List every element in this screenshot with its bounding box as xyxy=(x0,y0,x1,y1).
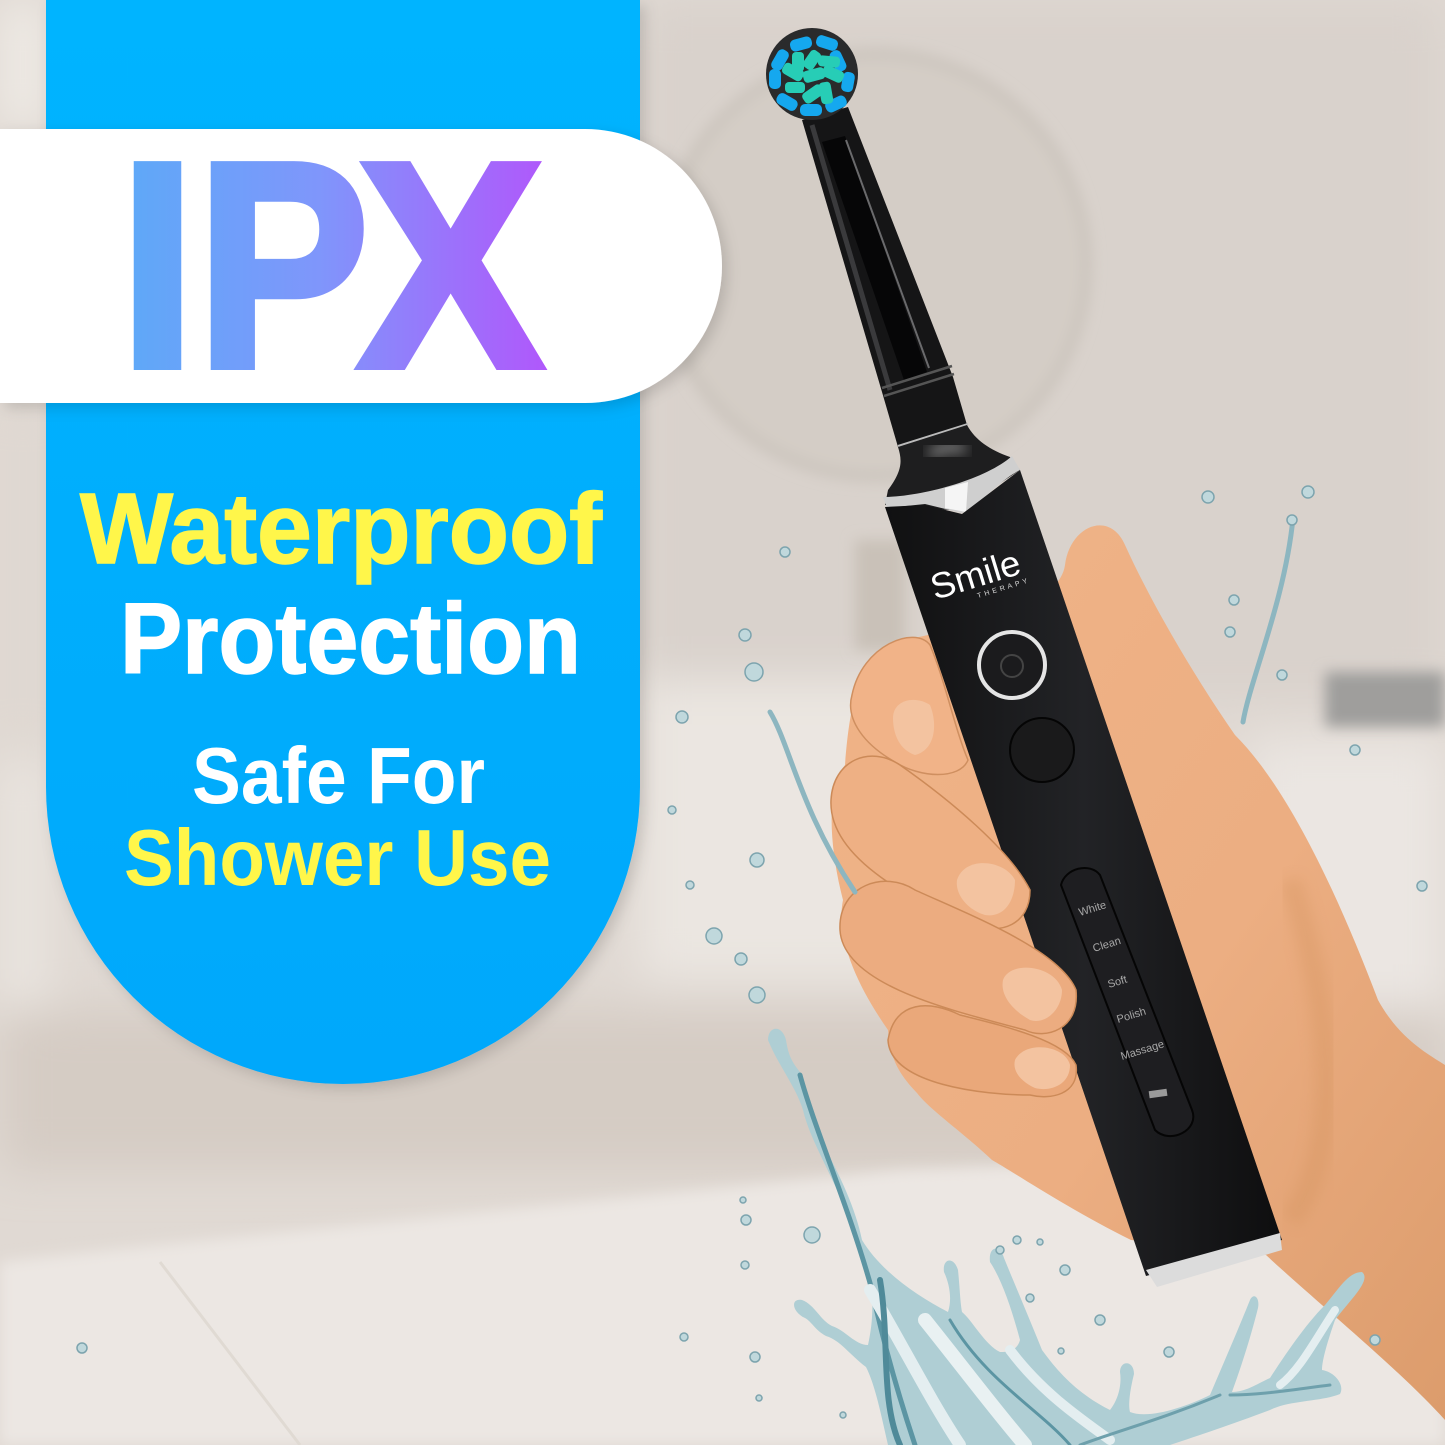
title: IPX: X xyxy=(358,102,544,428)
mode panel: White xyxy=(1077,899,1108,919)
logo: Smile xyxy=(925,542,1025,608)
toothbrush xyxy=(766,28,1282,1287)
heading: Waterproof: Waterproof xyxy=(80,473,603,585)
second button xyxy=(1010,718,1074,782)
mode panel xyxy=(1061,868,1193,1136)
subheading: Safe For: Safe For xyxy=(192,731,485,820)
silver base ring xyxy=(1146,1233,1282,1287)
white pill banner xyxy=(0,129,722,403)
blue panel xyxy=(46,0,640,1084)
fingers in front of toothbrush xyxy=(831,637,1076,1097)
water splash xyxy=(768,518,1365,1445)
brush neck xyxy=(802,107,968,447)
mode panel: Massage xyxy=(1119,1038,1166,1063)
title: IPX: I xyxy=(119,102,196,428)
power button xyxy=(979,632,1045,698)
mode panel: Clean xyxy=(1091,935,1122,955)
hand behind toothbrush xyxy=(832,525,1445,1420)
mode panel: Soft xyxy=(1106,974,1129,991)
fingernails xyxy=(893,700,934,755)
mode panel: Polish xyxy=(1115,1006,1148,1026)
water droplets xyxy=(77,486,1427,1418)
title: IPX: P xyxy=(197,102,369,428)
handle body xyxy=(885,470,1282,1276)
collar xyxy=(885,425,1020,510)
logo: THERAPY xyxy=(977,578,1029,600)
subheading: Shower Use: Shower Use xyxy=(124,813,551,902)
brush head xyxy=(766,28,858,120)
title: IPX xyxy=(119,102,544,428)
heading: Protection: Protection xyxy=(120,583,581,695)
